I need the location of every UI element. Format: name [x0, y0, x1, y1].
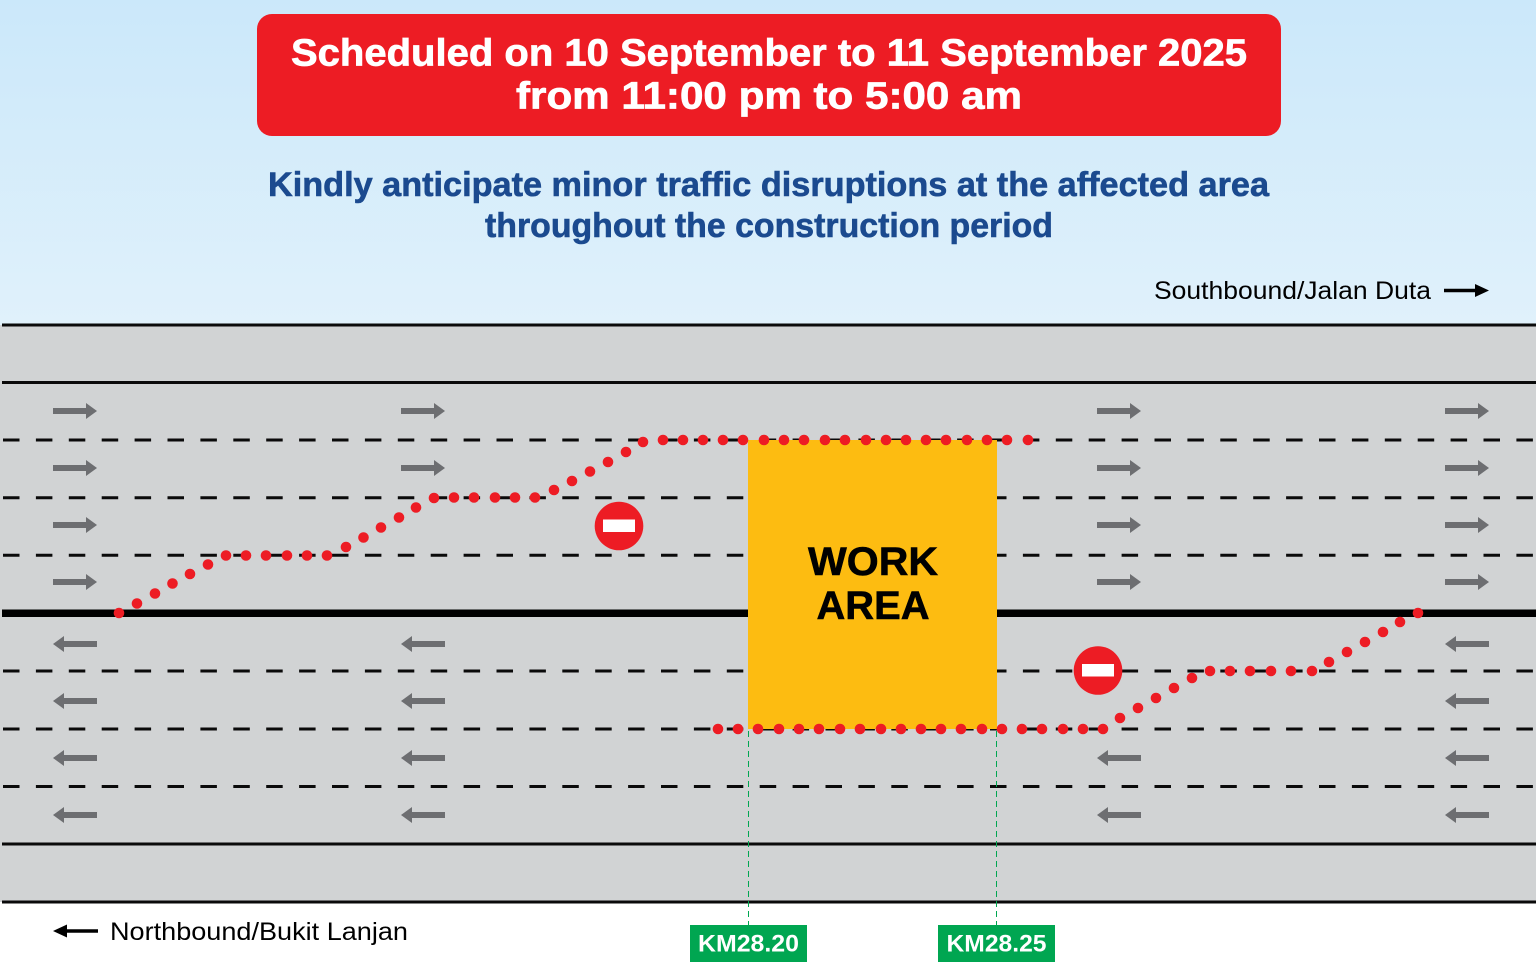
KM28.25 marker: KM28.25	[946, 930, 1046, 958]
northbound direction label: Northbound/Bukit Lanjan	[110, 918, 408, 946]
work area: AREA	[816, 584, 930, 628]
icon: no entry sign southbound	[595, 502, 643, 550]
northbound traffic diversion dotted line	[713, 608, 1423, 734]
schedule banner: Scheduled on 10 September to 11 September 2025	[291, 32, 1247, 74]
advisory text	[268, 166, 1270, 245]
southbound lane arrows	[53, 403, 1489, 590]
KM28.25 marker	[938, 925, 1055, 962]
southbound direction label: Southbound/Jalan Duta	[1154, 277, 1431, 305]
southbound traffic diversion dotted line	[114, 435, 1033, 618]
KM marker leader lines	[748, 731, 996, 925]
advisory text: throughout the construction period	[485, 207, 1053, 245]
northbound lane arrows	[53, 636, 1489, 823]
schedule banner	[257, 14, 1281, 136]
work area: WORK	[808, 540, 938, 584]
KM28.20 marker: KM28.20	[698, 930, 799, 958]
sky background	[0, 0, 1536, 325]
road surface	[0, 324, 1536, 904]
KM28.20 marker	[690, 925, 807, 962]
advisory text: Kindly anticipate minor traffic disruptions at the affected area	[268, 166, 1270, 204]
icon: no entry sign northbound	[1074, 646, 1122, 695]
schedule banner: from 11:00 pm to 5:00 am	[516, 76, 1022, 118]
work area	[748, 440, 997, 729]
